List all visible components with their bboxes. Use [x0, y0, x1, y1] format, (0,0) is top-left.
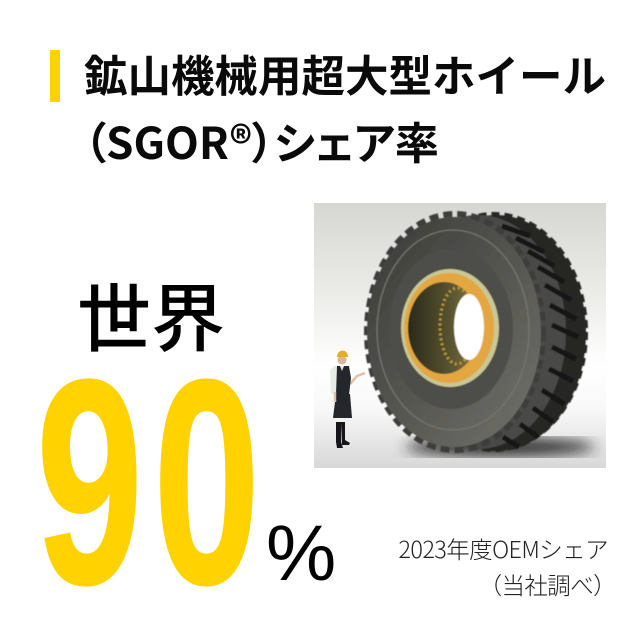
yellow rim: [401, 269, 499, 387]
ground shadow: [405, 438, 595, 456]
tread lugs: [502, 226, 578, 447]
vest: [336, 366, 351, 395]
bolt ring: [440, 288, 474, 364]
sidewall: [367, 217, 541, 447]
photo background: [314, 203, 606, 468]
tread: [406, 215, 586, 451]
arm: [350, 373, 365, 384]
skirt: [333, 394, 352, 418]
photo: giant tyre and woman: [314, 203, 606, 468]
socks and shoes: [336, 422, 350, 448]
title: 鉱山機械用超大型ホイール: [84, 42, 606, 105]
title: [84, 42, 606, 172]
hard hat: [337, 351, 348, 357]
source note: [398, 531, 616, 601]
source note: （当社調べ）: [479, 567, 616, 601]
title: （SGOR®）シェア率: [84, 108, 439, 172]
tyre: [367, 214, 586, 451]
percent sign: %: [266, 508, 336, 597]
sidewall shoulder lugs: [367, 214, 543, 450]
woman: [330, 351, 365, 448]
source note: 2023年度OEMシェア: [398, 531, 608, 565]
head: [338, 356, 346, 364]
accent bar: [50, 50, 60, 102]
arm down: [334, 392, 336, 402]
label: world: 世界: [77, 260, 225, 367]
lighter tread band: [390, 215, 566, 449]
centre hole: [454, 294, 484, 360]
blouse: [330, 366, 351, 394]
rim interior: [408, 282, 480, 374]
